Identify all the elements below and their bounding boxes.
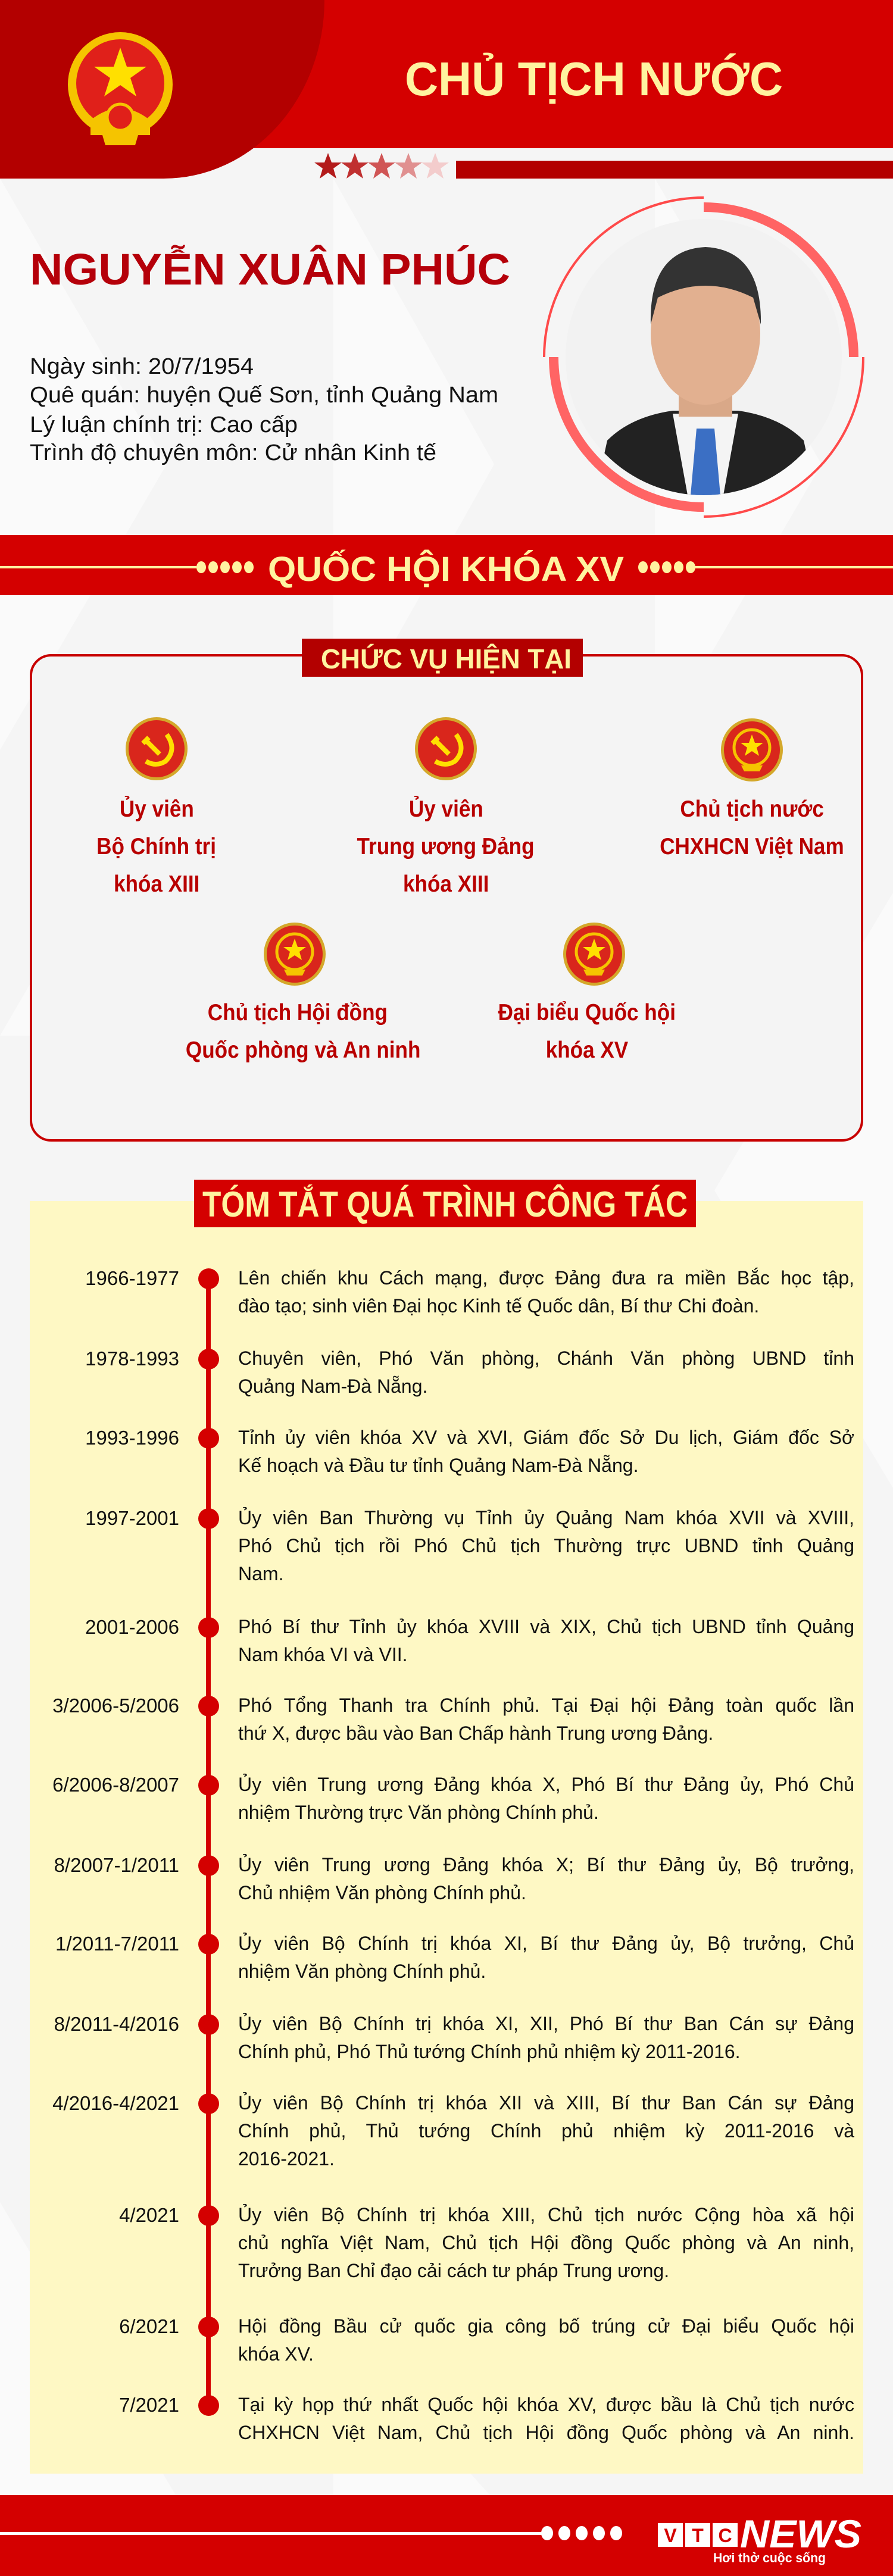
timeline entry 12: 4/2021 [119,2204,179,2226]
timeline entry 10: Ủy viên Bộ Chính trị khóa XI, XII, Phó Bí thư Ban Cán sự Đảng [238,2013,854,2034]
timeline entry 6: Phó Tổng Thanh tra Chính phủ. Tại Đại hội Đảng toàn quốc lần [238,1695,854,1716]
position 2: Ủy viên [409,796,483,822]
timeline entry 2: Quảng Nam-Đà Nẵng. [238,1375,427,1397]
icon: state emblem 2 [264,923,326,986]
timeline entry 7 [52,1774,854,1823]
position 1: Bộ Chính trị [97,834,216,859]
timeline entry 4: Phó Chủ tịch rồi Phó Chủ tịch Thường trực UBND tỉnh Quảng [238,1535,854,1556]
banner: Quốc hội khóa XV [0,535,893,595]
logo: VTC News: T [692,2525,704,2546]
timeline entry 9 [55,1932,854,1982]
timeline entry 7: Ủy viên Trung ương Đảng khóa X, Phó Bí thư Đảng ủy, Phó Chủ [238,1774,854,1795]
info text [30,354,498,465]
timeline entry 9: 1/2011-7/2011 [55,1933,179,1955]
position 2: Trung ương Đảng [357,834,535,859]
timeline entry 13: 6/2021 [119,2315,179,2337]
timeline entry 2: 1978-1993 [85,1348,179,1370]
info text: Trình độ chuyên môn: Cử nhân Kinh tế [30,440,436,465]
timeline entry 3: Tỉnh ủy viên khóa XV và XVI, Giám đốc Sở Du lịch, Giám đốc Sở [238,1427,854,1448]
panel label: Chức vụ hiện tại: CHỨC VỤ HIỆN TẠI [321,643,572,674]
timeline entry 13: khóa XV. [238,2343,314,2365]
timeline entry 5: Phó Bí thư Tỉnh ủy khóa XVIII và XIX, Chủ tịch UBND tỉnh Quảng [238,1616,854,1637]
timeline entry 6: 3/2006-5/2006 [52,1695,179,1717]
timeline entry 1: 1966-1977 [85,1267,179,1289]
timeline entry 7: nhiệm Thường trực Văn phòng Chính phủ. [238,1802,599,1823]
timeline entry 4 [85,1507,854,1584]
timeline entry 12 [119,2203,854,2281]
timeline entry 9: nhiệm Văn phòng Chính phủ. [238,1961,486,1982]
position 1: khóa XIII [114,871,199,897]
timeline entry 2: Chuyên viên, Phó Văn phòng, Chánh Văn phòng UBND tỉnh [238,1348,854,1369]
timeline entry 3: 1993-1996 [85,1427,179,1449]
position 5 [498,1000,676,1063]
timeline entry 5 [85,1616,854,1665]
timeline entry 11: 4/2016-4/2021 [52,2092,179,2114]
info text: Quê quán: huyện Quế Sơn, tỉnh Quảng Nam [30,383,498,408]
timeline line [206,1278,211,2405]
timeline entry 14 [119,2394,854,2443]
timeline entry 10: 8/2011-4/2016 [54,2013,179,2035]
timeline entry 14: Tại kỳ họp thứ nhất Quốc hội khóa XV, được bầu là Chủ tịch nước [238,2394,854,2415]
timeline entry 5: Nam khóa VI và VII. [238,1644,408,1665]
logo: VTC News: C [718,2525,732,2546]
icon: state emblem 3 [563,923,625,986]
position 5: Đại biểu Quốc hội [498,1000,676,1026]
timeline entry 6: thứ X, được bầu vào Ban Chấp hành Trung ương Đảng. [238,1722,713,1744]
header dark corner shape [0,0,324,179]
timeline entry 12: Ủy viên Bộ Chính trị khóa XIII, Chủ tịch nước Cộng hòa xã hội [238,2204,854,2225]
timeline entry 8: 8/2007-1/2011 [54,1854,179,1876]
timeline entry 11: Chính phủ, Thủ tướng Chính phủ nhiệm kỳ 2011-2016 và [238,2120,854,2142]
timeline entry 11: 2016-2021. [238,2148,335,2169]
position 3: Chủ tịch nước [680,796,824,822]
timeline entry 14: CHXHCN Việt Nam, Chủ tịch Hội đồng Quốc phòng và An ninh. [238,2422,854,2443]
header band [0,0,893,148]
position 1 [97,796,216,897]
timeline entry 3: Kế hoạch và Đầu tư tỉnh Quảng Nam-Đà Nẵng. [238,1455,638,1476]
timeline entry 12: Trưởng Ban Chỉ đạo cải cách tư pháp Trung ương. [238,2260,669,2281]
logo: VTC News: NEWS [740,2512,861,2556]
logo: VTC News [658,2512,861,2565]
name: NGUYỄN XUÂN PHÚC [30,245,510,294]
name and info [30,245,510,465]
info text: Lý luận chính trị: Cao cấp [30,412,298,437]
timeline entry 10: Chính phủ, Phó Thủ tướng Chính phủ nhiệm kỳ 2011-2016. [238,2041,741,2062]
icon: state emblem 1 [721,718,783,781]
timeline entry 8: Chủ nhiệm Văn phòng Chính phủ. [238,1882,526,1903]
timeline entry 8 [54,1853,854,1903]
logo: VTC News: V [664,2525,677,2546]
icon: party emblem 2 [415,717,477,780]
timeline entry 1 [85,1267,854,1317]
position 3: CHXHCN Việt Nam [660,834,844,859]
info text: Ngày sinh: 20/7/1954 [30,354,254,379]
footer [0,2495,893,2576]
portrait [543,196,864,518]
timeline entry 11 [52,2092,855,2169]
timeline entry 5: 2001-2006 [85,1616,179,1638]
timeline entry 4: Ủy viên Ban Thường vụ Tỉnh ủy Quảng Nam khóa XVII và XVIII, [238,1507,854,1528]
timeline entry 7: 6/2006-8/2007 [52,1774,179,1796]
title: CHỦ TỊCH NƯỚC [405,52,783,105]
position 4 [186,1000,420,1063]
timeline entry 10 [54,2013,854,2062]
panel: timeline [30,1201,863,2474]
position 4: Chủ tịch Hội đồng [208,1000,388,1026]
icon: party emblem 1 [126,717,188,780]
timeline entry 4: 1997-2001 [85,1507,179,1529]
timeline entry 8: Ủy viên Trung ương Đảng khóa X; Bí thư Đảng ủy, Bộ trưởng, [238,1854,854,1875]
timeline entry 13 [119,2315,854,2365]
timeline entry 1: Lên chiến khu Cách mạng, được Đảng đưa ra miền Bắc học tập, [238,1267,854,1289]
timeline entry 1: đào tạo; sinh viên Đại học Kinh tế Quốc dân, Bí thư Chi đoàn. [238,1295,759,1317]
panel: current positions [30,654,863,1142]
timeline entry 4: Nam. [238,1563,283,1584]
timeline entry 9: Ủy viên Bộ Chính trị khóa XI, Bí thư Đảng ủy, Bộ trưởng, Chủ [238,1933,854,1954]
position 1: Ủy viên [120,796,193,822]
position 5: khóa XV [546,1037,628,1063]
timeline entry 3 [85,1427,854,1476]
timeline entry 12: chủ nghĩa Việt Nam, Chủ tịch Hội đồng Quốc phòng và An ninh, [238,2232,854,2253]
position 2 [357,796,535,897]
stars rating [314,153,449,179]
logo: VTC News: Hơi thở cuộc sống [713,2550,826,2565]
timeline entry 2 [85,1348,854,1397]
position 4: Quốc phòng và An ninh [186,1037,420,1063]
position 2: khóa XIII [403,871,489,897]
timeline entry 6 [52,1695,854,1744]
header bar [456,161,893,179]
timeline entry 11: Ủy viên Bộ Chính trị khóa XII và XIII, Bí thư Ban Cán sự Đảng [238,2092,854,2114]
timeline entry 14: 7/2021 [119,2394,179,2416]
timeline entry 13: Hội đồng Bầu cử quốc gia công bố trúng cử Đại biểu Quốc hội [238,2315,854,2337]
icon: national emblem [68,32,173,145]
banner: Quốc hội khóa XV: QUỐC HỘI KHÓA XV [268,550,624,589]
position 3 [660,796,844,859]
